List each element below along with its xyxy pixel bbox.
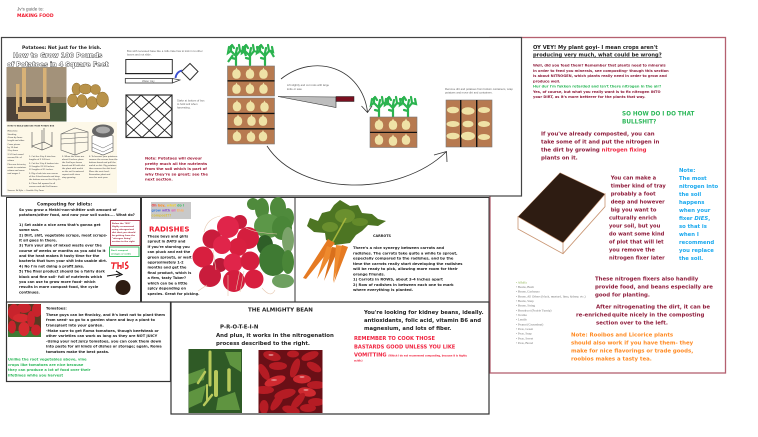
- text: tomatoes: -Make sure to get Roma tomatoes, though beefsteak or: [46, 329, 159, 333]
- text: timber tray: timber kind of tray: [611, 184, 666, 190]
- text: timber tray: big you want to: [611, 208, 657, 214]
- note: rooibos: should also work if you have them- they: [571, 340, 694, 346]
- text: composting steps: some sun.: [19, 228, 39, 232]
- text: carrots: 1) Carrots in ROWS, about 3-4 inches apart: [353, 278, 443, 282]
- note: vine crops: crops like tomatoes are nice because: [8, 363, 84, 367]
- text: feeding plants: in order to feed you minerals, see composting- though this section: [533, 69, 669, 73]
- text: feeding plants: Hur dur I'm fukken retarded and isn't there nitrogen in the air?: [533, 84, 661, 88]
- list: nitrogen fixers: • Beans, Garbanzo: [516, 290, 540, 295]
- callout: red box: Below the "BIG": [112, 222, 131, 225]
- text: timber tray: culturally enrich: [609, 216, 657, 222]
- instruction sheet: mulch or dirt. Dig potatoes: [89, 164, 116, 167]
- text: protein: And plus, it works in the nitrogenation: [216, 333, 334, 339]
- instruction sheet: [6, 122, 118, 193]
- text: composting steps: continues.: [19, 290, 40, 294]
- instruction sheet: the 2nd layer boxes: [62, 161, 82, 164]
- instruction sheet: 4 two-by-fours: [8, 136, 22, 139]
- text: radishes: a firm, tasty Tuber?: [148, 276, 186, 280]
- note: nutrients: [145, 156, 208, 182]
- instruction sheet: 1. Cut the 4-by-4 into four: [29, 155, 56, 158]
- photo: bean plant: [188, 349, 242, 413]
- callout: green box: Don't compost: [111, 249, 128, 252]
- text: kidney beans: [363, 310, 484, 332]
- callout: red box: [110, 220, 140, 246]
- instruction sheet: 2-by-fours: [8, 149, 18, 152]
- instruction sheet: HOW TO BUILD AND USE YOUR POTATO BOX: [8, 126, 55, 128]
- text: composting steps: 2) Dirt, shit, vegetable scraps, meat scraps-: [19, 233, 108, 237]
- instruction sheet: Stacking: [8, 133, 17, 136]
- instruction sheet: Source: Ed Kyle — Seattle City Farm: [8, 189, 44, 192]
- text: carrots: where everything is planted.: [353, 288, 414, 292]
- note: vine crops: [8, 358, 91, 377]
- instruction sheet: Cross pieces: [8, 143, 20, 146]
- instruction sheet: the plant with mulch: [62, 167, 84, 170]
- heading: so how do i do that: [622, 112, 695, 126]
- instruction sheet: Plus one-lot-entry: [8, 163, 27, 166]
- instruction sheet: save for next year.: [89, 176, 108, 179]
- diagram: bottom potatoes: [445, 87, 513, 147]
- text: feeding plants: is about NITROGEN, which plants really need in order to grow and: [533, 74, 667, 78]
- text: fixers provide food: provide food, and beans especially are: [595, 284, 713, 290]
- note: vine crops: lifetimes while you harvest: [8, 373, 63, 377]
- text: fixers provide food: [595, 276, 713, 298]
- note: when fixer dies: recommend: [679, 240, 714, 246]
- photo: radishes: [192, 197, 294, 296]
- panel: composting: [6, 198, 140, 302]
- text: feeding plants: your DIRT, as it's more betterer for the plants that way.: [533, 95, 646, 99]
- text: composting steps: 5) The final product should be a fairly dark: [19, 270, 105, 274]
- text: radishes: green sprouts, or wait: [148, 255, 192, 259]
- text: composting steps: potatoes/other food, and now your soil sucks.... What do?: [19, 213, 135, 217]
- diagram: bottom potatoes: Remove dirt and potatoes from bottom containers, wrap: [445, 87, 513, 91]
- header: MAKING FOOD: [17, 13, 54, 19]
- diagram: stacked potato boxes: [228, 45, 274, 144]
- list: nitrogen fixers: • Breadroot (Prairie Turnip): [516, 308, 551, 312]
- text: composted: take some of it and put the nitrogen in: [541, 140, 659, 146]
- note: nutrients: why they're so great; see the: [145, 171, 208, 176]
- warning: cook beans: acidic): [354, 360, 363, 362]
- callout: green box: oranges or acidic: [111, 252, 132, 256]
- text: composting steps: results in more compost food, the cycle: [19, 285, 99, 289]
- note: when fixer dies: you replace: [679, 248, 714, 254]
- photo: tomatoes: [8, 303, 42, 337]
- diagram: slats: [126, 95, 205, 138]
- text: protein: [216, 324, 334, 347]
- header: [17, 6, 54, 19]
- diagram: milk crate: Box with recessed base like a milk crate has to lock in to other: [127, 49, 203, 53]
- text: after nitrogenating: section over to the left.: [596, 320, 668, 326]
- panel: potatoes: [2, 38, 522, 196]
- diagram: milk crate: Water tray: [142, 79, 155, 83]
- text: timber tray: you remove the: [609, 248, 655, 254]
- rainbow question: compost??: [152, 214, 171, 218]
- text: carrots: radishes. The carrots take quite a while to sprout,: [353, 251, 458, 255]
- callout: green box: [110, 247, 139, 256]
- text: composting steps: So you grow a Mekhi-non-shittier unit amount of: [19, 208, 117, 212]
- instruction sheet: the bottom one on the 4-by-4's: [29, 178, 61, 181]
- callout: red box: section to the right: [112, 240, 135, 243]
- instruction sheet: so the soil is watered: [62, 170, 84, 173]
- instruction sheet: repeat until vines: [62, 173, 80, 176]
- text: radishes: approximately 1-2: [148, 260, 184, 264]
- note: when fixer dies: The most: [679, 176, 707, 182]
- text: feeding plants: produce well.: [533, 79, 560, 83]
- text: carrots: time the carrots really start developing the radishes: [353, 262, 463, 266]
- text: fixers provide food: These nitrogen fixers also handily: [595, 276, 699, 282]
- note: when fixer dies: fixer DIES,: [679, 216, 710, 222]
- text: carrots: will be ready to pick, allowing more room for their: [353, 267, 458, 271]
- instruction sheet: and wages 1: [8, 173, 21, 175]
- text: carrots: [353, 246, 463, 292]
- panel: tomatoes: [6, 302, 170, 382]
- handwritten: this: [111, 262, 128, 269]
- note: vine crops: Unlike the root vegetables above, vine: [8, 358, 87, 362]
- text: kidney beans: magnesium, and lots of fiber.: [364, 326, 451, 332]
- text: carrots: 2) Row of radishes in between each one to mark: [353, 283, 454, 287]
- list: nitrogen fixers: • Peanut (Groundnut): [516, 322, 543, 326]
- text: radishes: which can be a little: [148, 281, 188, 285]
- instruction sheet: corners and add 2x4 frames: [29, 185, 57, 188]
- instruction sheet: 12 lengths 22 3/4 inches,: [29, 165, 55, 168]
- instruction sheet: length and sides: [8, 139, 24, 142]
- heading: how to grow: of Potatoes in 4 Square Feet: [7, 62, 108, 68]
- heading: radishes: RADISHES: [149, 224, 189, 234]
- list: nitrogen fixers: • Alfalfa: [516, 280, 527, 284]
- text: after nitrogenating: [576, 304, 710, 326]
- callout: red box: dirt that you should: [112, 231, 136, 234]
- diagram: bottom potatoes: potatoes and move dirt and containers.: [445, 90, 493, 94]
- instruction sheet: stop growing.: [62, 176, 76, 179]
- text: radishes: spicy depending on: [148, 287, 186, 291]
- callout: red box: "nitrogen fixing": [112, 237, 131, 240]
- text: timber tray: deep and however: [611, 200, 665, 206]
- instruction sheet: about 8 inches, place: [62, 158, 84, 161]
- list: nitrogen fixers: • Lentils: [516, 318, 528, 322]
- text: composting steps: it all goes in there.: [19, 238, 57, 242]
- arrow: move: [267, 146, 447, 185]
- text: feeding plants: Yes, of course, but what you really want is to fix nitrogen INTO: [532, 90, 661, 94]
- panel: radishes: [142, 197, 295, 302]
- note: when fixer dies: when I: [679, 232, 699, 238]
- text: carrots: especially compared to the radishes, and by the: [353, 256, 454, 260]
- note: rooibos: [571, 332, 694, 362]
- text: composting steps: course of weeks or months as you add to it: [19, 249, 106, 253]
- note: nutrients: next section.: [145, 176, 173, 182]
- text: radishes: months and get the: [148, 266, 187, 270]
- heading: so how do i do that: SO HOW DO I DO THAT: [622, 112, 695, 118]
- text: timber tray: probably a foot: [611, 192, 656, 198]
- instruction sheet: Move the next level.: [89, 170, 110, 173]
- text: composted: the dirt by growing nitrogen fixing: [541, 148, 647, 154]
- header: Jv's guide to:: [17, 6, 44, 12]
- text: feeding plants: Well, did you feed them? Remember that plants need to minerals: [533, 64, 666, 68]
- list: nitrogen fixers: • Beans, Bush: [516, 285, 534, 290]
- instruction sheet: seeds in container: [8, 166, 26, 169]
- instruction sheet: 6. To harvest your potatoes,: [89, 155, 118, 158]
- text: composted: If you've already composted, you can: [541, 132, 655, 138]
- diagram: knife: knife or saw.: [287, 87, 303, 91]
- instruction sheet: Materials:: [8, 130, 18, 132]
- instruction sheet: of the 4-foot-bounds and drop: [29, 175, 60, 178]
- instruction sheet: bottom board and pull the: [89, 161, 116, 164]
- text: protein: P-R-O-T-E-I-N: [220, 324, 259, 330]
- text: composting steps: and the heat makes it tasty time for the: [19, 254, 100, 258]
- rainbow question: grow with all this: [152, 208, 184, 212]
- note: rooibos: make for nice flavorings or trade goods,: [571, 348, 693, 354]
- text: carrots: There's a nice synergy between carrots and: [353, 246, 444, 250]
- note: vine crops: they can produce a lot of food over their: [8, 368, 91, 372]
- diagram: slats: Stake at bottom of box: [177, 98, 205, 102]
- instruction sheet: board and fill with dirt: [62, 164, 85, 167]
- heading: carrots: CARROTS: [373, 234, 392, 238]
- list: nitrogen fixers: [516, 280, 586, 346]
- photo: potatoes: [68, 83, 108, 110]
- rainbow question: Oh boy, what do I: [152, 204, 184, 208]
- heading: so how do i do that: BULLSHIT?: [622, 120, 656, 126]
- text: kidney beans: antioxidants, folic acid, vitamin B6 and: [364, 318, 481, 324]
- photo: wooden frame: [6, 67, 66, 122]
- text: radishes: can pluck and eat the: [148, 250, 191, 254]
- heading: oy vey: [533, 45, 662, 58]
- panel: carrots: [295, 198, 489, 302]
- list: nitrogen fixers: • Peas, Bread: [516, 341, 533, 346]
- text: composting steps: 1) Set aside a nice area that's gonna get: [19, 223, 101, 227]
- text: fixers provide food: good for planting.: [595, 292, 650, 298]
- text: timber tray: [609, 176, 666, 262]
- instruction sheet: Remember plant and: [89, 173, 111, 176]
- note: rooibos: roobios makes a tasty tea.: [571, 356, 652, 362]
- text: timber tray: nitrogen fixer later: [609, 256, 665, 262]
- note: when fixer dies: so that is: [679, 224, 707, 230]
- text: composted: [541, 132, 659, 162]
- note: when fixer dies: nitrogen into: [679, 184, 718, 190]
- text: tomatoes: [46, 306, 165, 354]
- note: when fixer dies: Note:: [679, 168, 695, 174]
- note: nutrients: pretty much all the nutrients: [145, 161, 208, 166]
- note: when fixer dies: [679, 168, 718, 262]
- diagram: knife: Lift slightly and cut roots with large: [287, 83, 330, 87]
- text: radishes: species. Great for picking.: [148, 292, 199, 296]
- instruction sheet: lengths of 3 3/4 feet.: [29, 158, 51, 161]
- text: timber tray: of plot that will let: [609, 240, 664, 246]
- list: nitrogen fixers: • Jicama: [516, 313, 527, 317]
- diagram: knife: [278, 83, 354, 108]
- instruction sheet: by 12-foot: [8, 146, 18, 149]
- text: radishes: These boys and girls: [148, 234, 188, 238]
- rainbow question: [151, 202, 191, 219]
- text: timber tray: You can make a: [610, 176, 657, 182]
- instruction sheet: remove the screws from the: [89, 158, 118, 161]
- text: timber tray: your soil, but you: [609, 224, 661, 230]
- heading: almighty bean: THE ALMIGHTY BEAN: [248, 308, 313, 314]
- instruction sheet: 12 lengths of 21 inches.: [29, 168, 54, 171]
- text: carrots: orange friends.: [353, 272, 386, 276]
- text: composted: plants on it.: [541, 156, 578, 162]
- note: when fixer dies: the soil: [679, 192, 701, 198]
- icon: soil tray: [518, 173, 605, 254]
- text: after nitrogenating: After nitrogenating the dirt, it can be: [596, 304, 710, 310]
- text: composting steps: bacteria that turn your shit into usable dirt.: [19, 259, 107, 263]
- diagram: milk crate: [125, 49, 203, 83]
- text: composting steps: black and fine soil- full of nutrients which: [19, 275, 103, 279]
- instruction sheet: 4. Place 4x4 upward in all: [29, 182, 55, 185]
- text: timber tray: do want some kind: [609, 232, 665, 238]
- list: nitrogen fixers: • Beans, Snap: [516, 299, 534, 304]
- text: protein: process described to the right.: [216, 341, 310, 347]
- list: nitrogen fixers: • Beans, All Others (black, mustard, lima, kidney, etc.): [516, 294, 586, 299]
- photo: carrots: [303, 200, 386, 283]
- panel: nitrogen section: [490, 38, 726, 373]
- text: radishes: [148, 234, 199, 296]
- arrow: lift: [281, 66, 372, 112]
- instruction sheet: 3. Dig a hole into one corner: [29, 172, 58, 175]
- text: composting steps: 4) No I'm not doing a profit joke.: [19, 264, 84, 268]
- text: tomatoes: from seed- so go to a garden store and buy a plant to: [46, 318, 155, 322]
- diagram: slats: harvesting.: [177, 106, 191, 110]
- diagram: lifted boxes: [370, 97, 417, 148]
- text: composting steps: [19, 208, 135, 294]
- callout: red box: Highly recommend: [112, 225, 135, 228]
- diagram: milk crate: boxes and not slide.: [127, 52, 152, 56]
- list: nitrogen fixers: • Peas, Green: [516, 327, 534, 332]
- text: tomatoes: These guys can be finnicky, and it's best not to plant them: [46, 313, 165, 317]
- text: after nitrogenating: re-enriched: [576, 312, 611, 318]
- panel: beans: [171, 302, 489, 416]
- text: tomatoes: tomatoes make the best pasta.: [46, 350, 109, 354]
- text: radishes: sprout in DAYS and: [148, 240, 186, 244]
- text: tomatoes: transplant into your garden.: [46, 324, 104, 328]
- warning: cook beans: REMEMBER TO COOK THOSE: [354, 336, 436, 342]
- heading: how to grow: [7, 52, 108, 68]
- warning: cook beans: VOMITTING (Which I do not recommend composting, because it is highly: [354, 352, 467, 358]
- text: tomatoes: into paste for all kinds of dishes or storage; again, Roma: [46, 344, 162, 348]
- note: when fixer dies: happens: [679, 200, 704, 206]
- instruction sheet: then remove the dirt level: [89, 167, 116, 170]
- photo: kidney beans: [258, 350, 322, 413]
- warning: cook beans: BASTARDS GOOD UNLESS YOU LIKE: [354, 344, 456, 350]
- heading: oy vey: OY VEY! My plant goyi- I mean crops aren't: [533, 45, 658, 51]
- note: when fixer dies: the soil.: [679, 256, 703, 262]
- instruction sheet: 3 1/2-inch wood: [8, 154, 24, 156]
- text: tomatoes: other varieties can work as long as they are NOT JUICY: [46, 334, 158, 338]
- arrow: hand: [107, 271, 122, 277]
- list: nitrogen fixers: • Peas, Sweet: [516, 336, 533, 341]
- diagram: slats: to hold soil when: [177, 102, 198, 106]
- note: rooibos: Note: Rooibos and Licorice plants: [571, 332, 673, 338]
- instruction sheet: 5. When the vines are: [62, 155, 85, 158]
- text: tomatoes: Tomatoes:: [46, 306, 67, 310]
- list: nitrogen fixers: • Beans, String: [516, 304, 535, 309]
- instruction sheet: screws,1lb. of: [8, 156, 22, 159]
- text: composting steps: you can use to grow more food- which: [19, 280, 96, 284]
- callout: red box: using nitrogenised: [112, 228, 134, 231]
- text: radishes: if you're starving you: [148, 245, 190, 249]
- note: nutrients: Note: Potatoes will devour: [145, 156, 202, 160]
- heading: oy vey: producing very much, what could be wrong?: [533, 52, 662, 58]
- note: nutrients: from the soil which is part of: [145, 166, 207, 171]
- instruction sheet: rebars and move: [8, 169, 25, 172]
- warning: cook beans: [354, 336, 467, 362]
- text: composting steps: 3) Turn your pile of mixed waste over the: [19, 244, 102, 248]
- note: when fixer dies: when your: [679, 208, 711, 214]
- text: feeding plants: [532, 64, 669, 99]
- callout: red box: be getting from the: [112, 234, 136, 237]
- text: radishes: final product, which is: [148, 271, 191, 275]
- text: tomatoes: -Using your not juicy tomatoes, you can cook them down: [46, 340, 162, 344]
- text: kidney beans: You're looking for kidney beans, ideally.: [363, 310, 484, 316]
- heading: composting: Composting for idiots:: [37, 202, 92, 208]
- list: nitrogen fixers: • Peas, Snap: [516, 332, 532, 337]
- text: after nitrogenating: quite nicely in the composting: [612, 312, 704, 318]
- heading: potatoes: Potatoes: Not just for the Irish.: [22, 45, 102, 51]
- instruction sheet: 2. Cut the 2-by-6 lumber into: [29, 162, 59, 165]
- icon: compost pile: [116, 280, 130, 295]
- heading: how to grow: How to Grow 100 Pounds: [13, 52, 102, 60]
- instruction sheet: rebars: [8, 159, 14, 162]
